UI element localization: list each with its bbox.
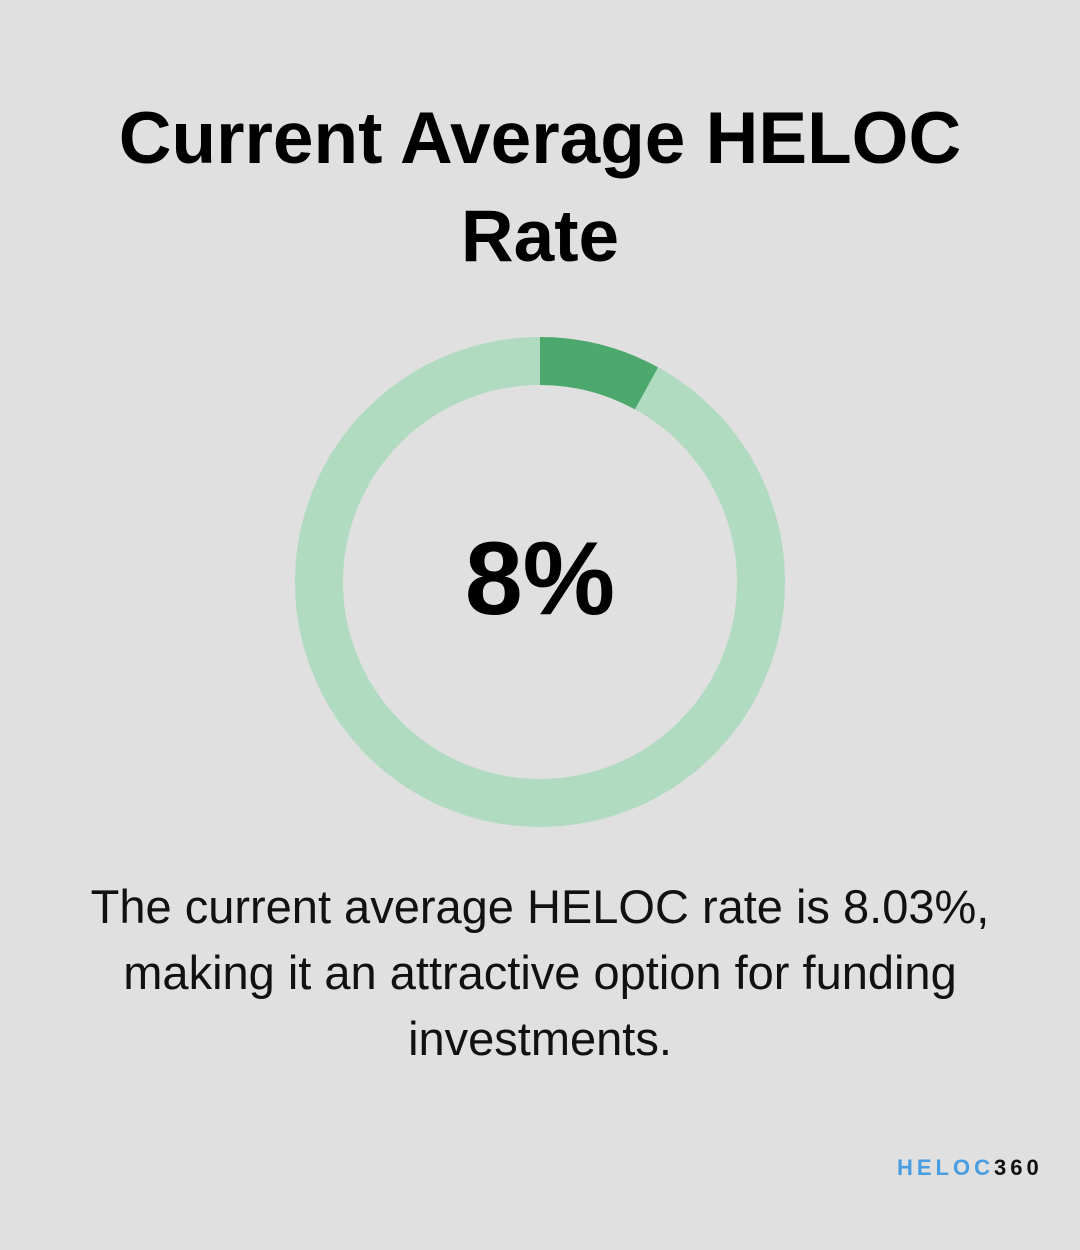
donut chart: 8% xyxy=(465,521,615,637)
description text: The current average HELOC rate is 8.03%, making it an attractive option for funding investments. xyxy=(91,880,989,1065)
title xyxy=(119,98,961,277)
title: Current Average HELOC xyxy=(119,98,961,179)
title: Rate xyxy=(461,196,619,277)
logo: HELOC360 xyxy=(897,1155,1043,1180)
